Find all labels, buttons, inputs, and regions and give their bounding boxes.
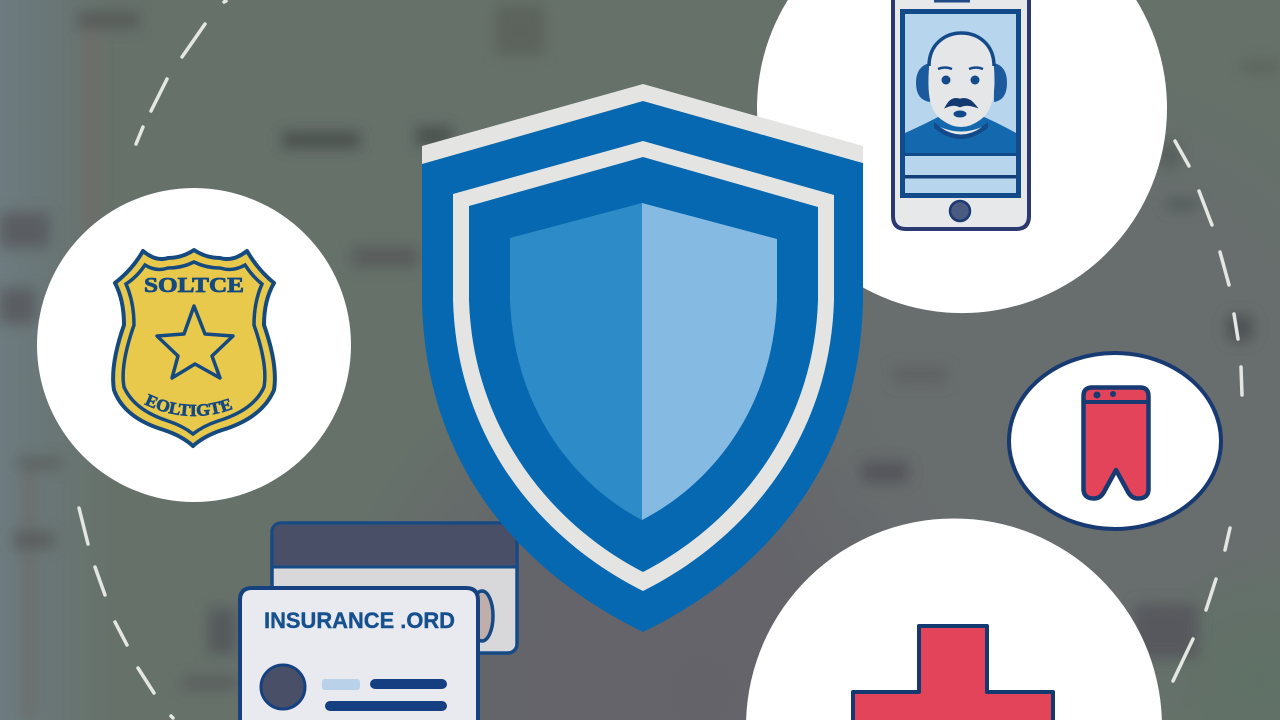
shield inner white ring	[453, 141, 834, 591]
front insurance card	[240, 588, 478, 720]
portrait	[905, 33, 1016, 153]
shield left panel	[510, 203, 642, 520]
card title: INSURANCE .ORD	[264, 608, 455, 633]
shield right panel	[642, 203, 777, 520]
dashed orbit: upper left	[136, 1, 226, 144]
small bookmark ellipse	[1009, 353, 1221, 529]
back insurance card	[272, 523, 517, 653]
badge circle	[37, 188, 351, 502]
card photo	[261, 665, 305, 709]
icon: police badge	[111, 248, 277, 448]
badge star	[157, 306, 233, 378]
icon: phone with portrait	[893, 0, 1029, 229]
shield top white band	[422, 84, 863, 164]
icon: red bookmark	[1084, 388, 1148, 498]
dashed orbit: lower left	[79, 508, 173, 718]
phone circle	[757, 0, 1167, 313]
shield outer body	[422, 101, 863, 632]
dashed orbit: right	[1173, 141, 1242, 681]
card lines	[322, 679, 447, 711]
badge top text: SOLTCE	[144, 273, 244, 297]
central shield	[422, 84, 863, 632]
icon: red cross	[853, 626, 1053, 720]
medical cross circle	[746, 518, 1162, 720]
badge bottom text: EOLTIGTE	[144, 394, 233, 416]
